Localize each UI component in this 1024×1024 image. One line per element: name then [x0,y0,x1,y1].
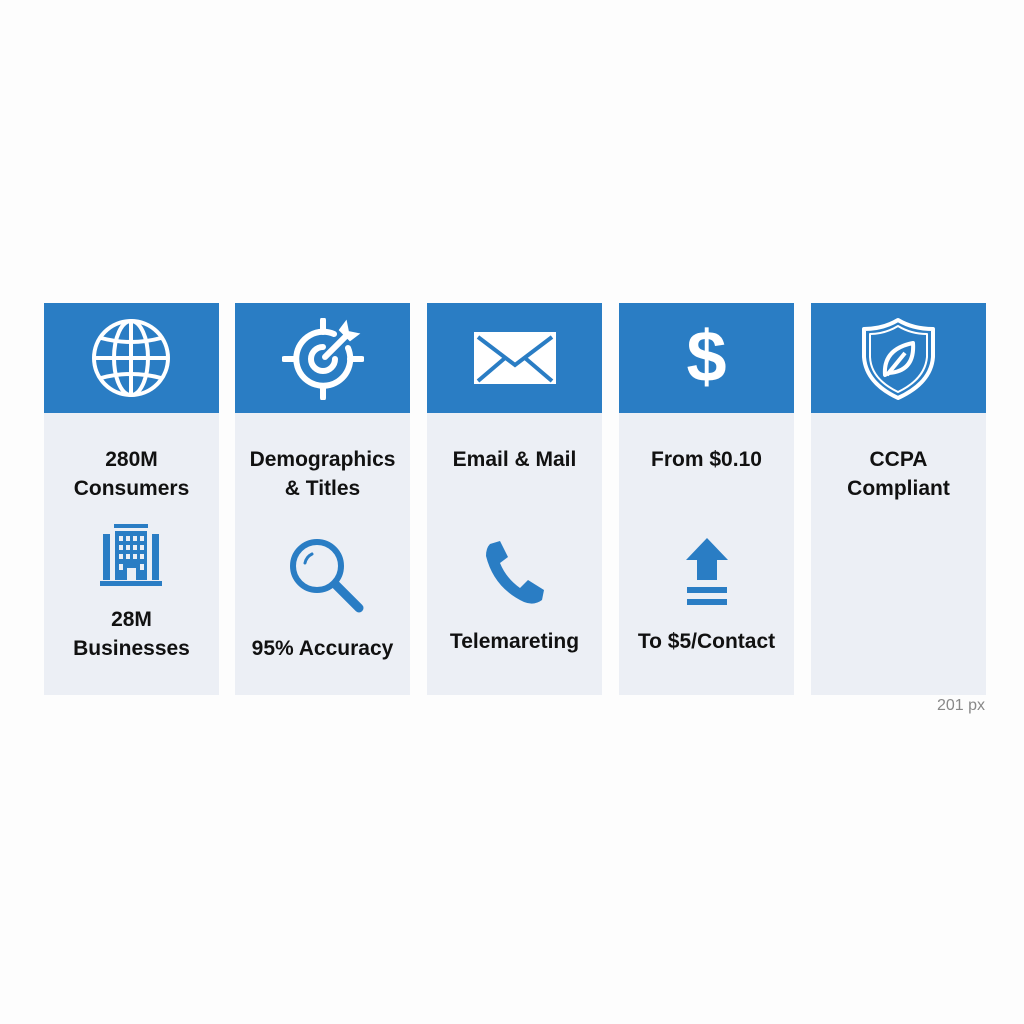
text: CCPA compliant: Compliant [847,477,950,500]
icon: dollar: $ [686,317,727,397]
text: 28M businesses: Businesses [73,637,190,660]
icon: magnifier [290,539,364,612]
text: CCPA compliant: CCPA [870,448,927,471]
icon: building [100,524,162,586]
panel: pricing [619,303,794,695]
text: 280M consumers [74,448,189,500]
text: to $5/contact: To $5/Contact [638,630,775,653]
icon: target [235,303,410,413]
panel: email [427,303,602,695]
icon: dollar [619,303,794,413]
text: 28M businesses: 28M [111,608,152,631]
text: from $0.10: From $0.10 [651,448,762,471]
text: 28M businesses [73,608,190,660]
text: demographics: Demographics [250,448,395,471]
icon: phone [486,541,544,604]
panel: consumers [44,303,219,695]
text: email & mail: Email & Mail [453,448,576,471]
icon: up arrow [686,538,728,605]
icon: globe [44,303,219,413]
panel: compliance [811,303,986,695]
icon: envelope [427,303,602,413]
text: demographics: & Titles [285,477,360,500]
panel: demographics [235,303,410,695]
text: CCPA compliant [847,448,950,500]
text: telemarketing: Telemareting [450,630,579,653]
text: 280M consumers: 280M [105,448,158,471]
text: 280M consumers: Consumers [74,477,189,500]
caption: size: 201 px [937,697,985,714]
text: accuracy: 95% Accuracy [252,637,393,660]
icon: shield leaf [811,303,986,413]
text: demographics [250,448,395,500]
